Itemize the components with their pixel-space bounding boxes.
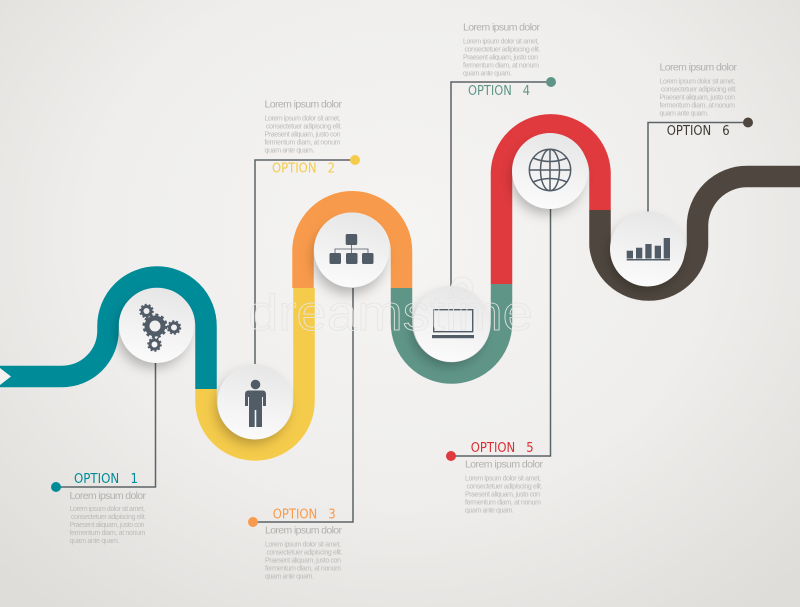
body copy: Praesent aliquam, justo con (465, 492, 540, 498)
body copy: Lorem ipsum dolor sit amet, (70, 506, 145, 513)
disc 1 with gears icon (119, 288, 194, 363)
text block: option 2 (264, 98, 342, 177)
body copy: fermentum diam, at nonum (265, 566, 341, 573)
label: OPTION 4 (468, 84, 530, 99)
icon: hierarchy (330, 234, 374, 264)
subheading: Lorem ipsum dolor (660, 62, 738, 74)
road segment: option 2 yellow (206, 288, 304, 450)
body copy: fermentum diam, at nonum (463, 62, 539, 69)
dot 2 (350, 155, 360, 165)
road segment: option 6 brown (600, 176, 800, 290)
body copy (265, 542, 343, 581)
body copy (463, 38, 541, 77)
body copy: fermentum diam, at nonum (70, 530, 146, 537)
body copy: Praesent aliquam, justo con (70, 522, 145, 529)
start arrow notch (0, 368, 11, 385)
disc 3 with hierarchy icon (314, 212, 389, 288)
body copy: Lorem ipsum dolor sit amet, (463, 38, 539, 45)
text block: option 3 (265, 508, 343, 581)
leader line 1 (56, 363, 156, 487)
body copy: fermentum diam, at nonum (660, 102, 735, 109)
body copy: Lorem ipsum dolor sit amet, (264, 116, 341, 123)
dot 5 (446, 451, 456, 461)
circle shadows (117, 142, 681, 444)
text block: option 1 (70, 472, 146, 545)
body copy: consectetuer adipiscing elit. (71, 514, 146, 521)
body copy (264, 116, 342, 155)
body copy: Praesent aliquam, justo con (265, 558, 341, 565)
icon: gears (140, 305, 180, 351)
road (0, 125, 800, 450)
dot 4 (546, 77, 556, 87)
road segment: option 5 red (502, 125, 600, 284)
road segment: option 1 teal (0, 277, 206, 389)
body copy: fermentum diam, at nonum (264, 140, 341, 147)
label: OPTION 6 (667, 124, 730, 139)
text block: option 5 (465, 441, 544, 514)
body copy: quam ante quam. (264, 148, 315, 155)
label: OPTION 1 (74, 472, 138, 487)
body copy: fermentum diam, at nonum (465, 500, 541, 506)
label: OPTION 2 (272, 162, 335, 177)
icon: laptop (432, 310, 474, 338)
road segment: option 3 orange (303, 202, 402, 288)
label: OPTION 3 (273, 508, 336, 523)
body copy: quam ante quam. (70, 538, 120, 545)
subheading: Lorem ipsum dolor (264, 98, 342, 110)
subheading: Lorem ipsum dolor (463, 22, 540, 34)
disc 4 with laptop icon (414, 286, 490, 362)
disc 5 with globe icon (512, 133, 588, 209)
icon: globe (529, 149, 571, 191)
watermark: dreamstime (248, 285, 533, 341)
body copy: Praesent aliquam, justo con (463, 54, 538, 61)
body copy: Lorem ipsum dolor sit amet, (465, 476, 541, 482)
body copy: Praesent aliquam, justo con (264, 132, 341, 139)
body copy: Lorem ipsum dolor sit amet, (265, 542, 341, 549)
icon: bar chart (627, 238, 670, 260)
dot 1 (51, 482, 61, 492)
leader line 3 (253, 288, 353, 522)
leader line 4 (451, 82, 551, 286)
body copy: consectetuer adipiscing elit. (266, 550, 343, 557)
disc 6 with bar chart icon (610, 212, 685, 286)
leader line 2 (255, 160, 355, 364)
body copy (660, 78, 737, 117)
subheading: Lorem ipsum dolor (465, 459, 544, 471)
body copy: quam ante quam. (465, 508, 514, 514)
body copy: consectetuer adipiscing elit. (266, 124, 342, 131)
body copy: quam ante quam. (660, 110, 709, 117)
icon: person (245, 380, 266, 427)
subheading: Lorem ipsum dolor (265, 524, 342, 536)
body copy: quam ante quam. (463, 70, 512, 77)
text block: option 6 (660, 62, 738, 139)
label: OPTION 5 (471, 441, 534, 456)
body copy (70, 506, 146, 545)
body copy (465, 476, 543, 514)
subheading: Lorem ipsum dolor (70, 490, 146, 502)
body copy: quam ante quam. (265, 574, 314, 581)
body copy: Lorem ipsum dolor sit amet, (660, 78, 736, 85)
disc 2 with person icon (218, 364, 292, 440)
body copy: consectetuer adipiscing elit. (466, 484, 543, 490)
body copy: Praesent aliquam, justo con (660, 94, 735, 101)
dot 3 (248, 517, 258, 527)
text block: option 4 (463, 22, 541, 99)
body copy: consectetuer adipiscing elit. (464, 46, 541, 53)
leader line 6 (648, 122, 748, 212)
dot 6 (743, 118, 753, 128)
road segment: option 4 green (402, 284, 502, 373)
body copy: consectetuer adipiscing elit. (661, 86, 737, 93)
leader line 5 (451, 209, 550, 456)
